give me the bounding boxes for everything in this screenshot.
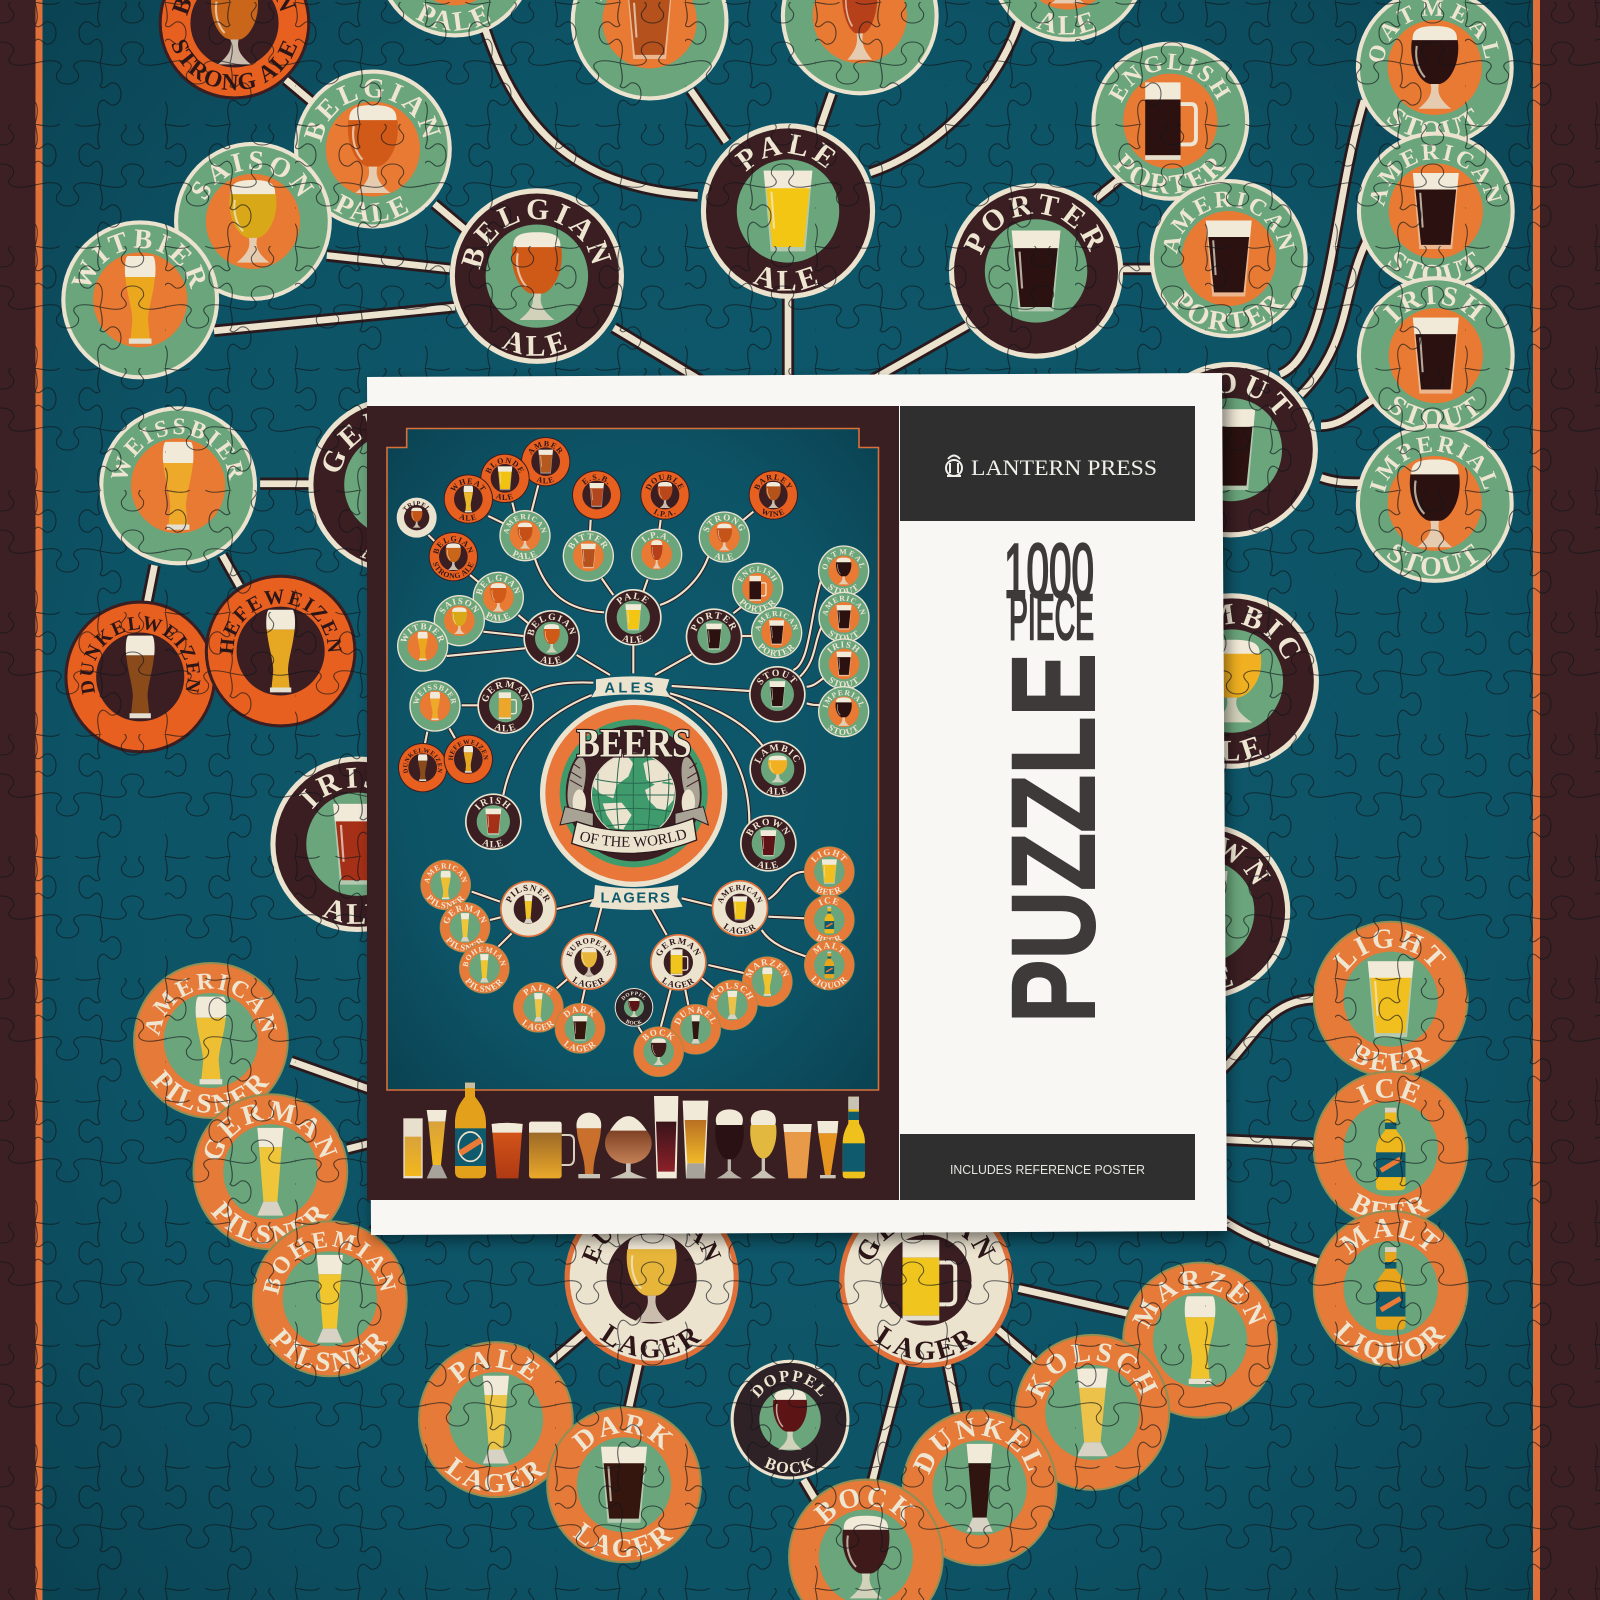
badge: Dunkel <box>902 1409 1058 1566</box>
badge: Light Beer: BEER <box>1350 1043 1430 1071</box>
badge: German Lager <box>839 1192 1014 1368</box>
badge: Hefeweizen <box>205 575 356 728</box>
badge: Hefeweizen: HEFEWEIZEN <box>220 589 342 654</box>
badge: Belgian Strong Ale <box>158 0 310 100</box>
badge: European Lager <box>565 1190 739 1366</box>
badge: Brown Ale <box>1116 824 1290 999</box>
badge: German Ale: ALE <box>360 550 367 559</box>
badge: Pale Ale <box>701 123 875 299</box>
badge: Marzen <box>1122 1262 1278 1419</box>
badge: Kolsch <box>1015 1334 1170 1491</box>
badge: Lambic Ale <box>1145 593 1319 769</box>
badge: Irish Stout <box>1357 276 1515 435</box>
glass: orange nonic <box>783 1124 812 1178</box>
mini poster tree <box>397 437 870 1077</box>
mini poster teal field <box>387 428 878 1090</box>
badge: Oatmeal Stout <box>1356 0 1514 147</box>
badge: German Lager: LAGER <box>870 1320 983 1367</box>
badge: Pale Lager: PALE <box>443 1343 548 1389</box>
badge: German Ale <box>308 397 483 573</box>
badge: Irish Ale: IRISH <box>298 768 367 810</box>
badge: Light Beer <box>1313 921 1469 1079</box>
badge: American Stout: STOUT <box>1388 251 1480 280</box>
badge: Belgian Ale <box>450 188 624 364</box>
badge: Pale Lager <box>418 1341 574 1499</box>
label plaque: Ales: ALES <box>699 402 860 453</box>
badge: Bock <box>788 1479 944 1600</box>
badge: American Porter: AMERICAN <box>1164 192 1295 254</box>
badge: Strong Ale: ALE <box>1036 12 1096 34</box>
icon: lantern <box>946 456 962 476</box>
badge: American Pilsner: PILSNER <box>145 1065 277 1121</box>
glass: pilsner <box>427 1110 447 1178</box>
glass: hefeweizen <box>576 1113 601 1178</box>
central medallion: Beers of the World: BEERS <box>613 531 967 670</box>
badge: Lambic Ale: LAMBIC <box>1223 604 1301 660</box>
glass: red ale nonic <box>492 1123 523 1178</box>
badge: German Pilsner: GERMAN <box>196 1095 344 1166</box>
badge: Belgian Ale: ALE <box>501 332 567 356</box>
badge: German Ale: GERMAN <box>323 414 367 472</box>
badge: Dark Lager: DARK <box>567 1408 681 1458</box>
badge: Saison <box>174 142 332 301</box>
label plaque: Lagers: LAGERS <box>687 1054 906 1105</box>
badge: Pale Lager: LAGER <box>440 1452 552 1499</box>
badge: Oatmeal Stout: STOUT <box>1386 108 1479 136</box>
badge: Saison: SAISON <box>192 151 314 200</box>
badge: American Lager: AMERICAN <box>1041 1034 1191 1102</box>
glass: tall dark ale <box>654 1096 678 1178</box>
badge: English Porter: ENGLISH <box>1108 54 1231 103</box>
brand: Lantern Press: LANTERN PRESS <box>971 455 1157 480</box>
badge: American Lager <box>1029 1025 1203 1201</box>
puzzle box <box>367 373 1227 1235</box>
badge: Witbier <box>61 220 219 379</box>
badge: American Stout: AMERICAN <box>1370 144 1502 206</box>
badge: European Lager: EUROPEAN <box>577 1199 726 1267</box>
heading: Puzzle: PUZZLE <box>988 653 1120 1023</box>
label plaque: Ales <box>659 394 903 459</box>
wheat sprigs <box>575 640 1003 827</box>
badge: American Stout <box>1357 131 1515 291</box>
central medallion: Beers of the World: OF THE WORLD <box>618 856 958 933</box>
glass: dark tulip <box>715 1109 744 1178</box>
badge: American Porter: PORTER <box>1172 290 1285 332</box>
badge: Pale Ale: ALE <box>752 266 818 291</box>
badge: Porter: PORTER <box>963 194 1104 256</box>
badge: Witbier: WITBIER <box>71 229 206 290</box>
badge: European Lager: LAGER <box>595 1318 708 1365</box>
badge: Dark Lager <box>546 1406 702 1564</box>
glass: snifter <box>605 1116 652 1178</box>
badge: Pilsner <box>378 1027 552 1203</box>
badge: Weissbier: WEISSBIER <box>110 418 243 481</box>
badge: English Porter <box>1091 42 1250 201</box>
badge: Weissbier <box>99 406 257 565</box>
badge: German Pilsner <box>192 1093 348 1252</box>
badge: Light Beer: LIGHT <box>1332 929 1446 972</box>
badge: Doppel Bock: BOCK <box>762 1453 818 1478</box>
glass: short pilsner <box>817 1121 838 1178</box>
badge: Bock: BOCK <box>809 1481 923 1530</box>
badge: Brown Ale: BROWN <box>1224 837 1271 884</box>
glass: straight pint <box>403 1118 423 1178</box>
badge: Ice Beer: BEER <box>1346 1187 1435 1229</box>
badge: Dark Lager: LAGER <box>568 1517 680 1564</box>
globe <box>591 752 676 830</box>
badge: Irish Stout: STOUT <box>1388 396 1480 426</box>
badge: Imperial Stout <box>1356 424 1514 583</box>
badge: Bohemian Pilsner <box>252 1220 408 1379</box>
glass: weizen <box>683 1101 708 1178</box>
bottle: slim <box>843 1097 865 1178</box>
badge: Ice Beer: ICE <box>1353 1073 1427 1111</box>
badge: Pale Ale: PALE <box>734 134 836 172</box>
badge: Doppel Bock: DOPPEL <box>747 1366 833 1401</box>
glass: golden tulip <box>750 1110 776 1178</box>
badge: Dunkel: DUNKEL <box>907 1411 1052 1478</box>
badge: English Porter: PORTER <box>1113 152 1226 194</box>
bottom black bar <box>900 1134 1195 1200</box>
mini poster panel <box>367 406 899 1200</box>
badge: Porter <box>949 183 1123 359</box>
badge: Stout <box>1144 362 1318 537</box>
badge: American Pale <box>388 0 522 38</box>
badge: Belgian Pale: PALE <box>334 194 409 222</box>
badge: I.P.A. <box>780 0 939 96</box>
badge: Bohemian Pilsner: PILSNER <box>264 1323 395 1379</box>
caption: includes reference poster: INCLUDES REFERENCE POSTER <box>950 1163 1145 1177</box>
badge: Malt Liquor: MALT <box>1335 1212 1447 1261</box>
badge: Stout: STOUT <box>1222 373 1294 415</box>
badge: Dunkelweizen <box>64 600 216 753</box>
glass row <box>403 1083 865 1178</box>
badge: Dunkelweizen: DUNKELWEIZEN <box>80 616 200 695</box>
badge: Ice Beer <box>1313 1070 1469 1229</box>
top black brand bar <box>900 406 1195 521</box>
badge: Brown Ale: ALE <box>1225 966 1234 988</box>
badge: Lambic Ale: ALE <box>1224 736 1262 761</box>
badge: German Lager: GERMAN <box>850 1198 1003 1267</box>
glass: mug <box>529 1122 574 1178</box>
badge: Strong Ale <box>998 0 1138 42</box>
badge: Bitter <box>570 0 729 100</box>
badge: American Lager: LAGER <box>1060 1153 1172 1199</box>
badge: Bohemian Pilsner: BOHEMIAN <box>259 1226 401 1297</box>
badge: Marzen: MARZEN <box>1127 1263 1273 1333</box>
box shadow <box>372 382 1228 1240</box>
label plaque: Lagers <box>653 1041 940 1118</box>
badge: American Pilsner: AMERICAN <box>140 968 282 1038</box>
badge: Imperial Stout: STOUT <box>1386 544 1479 576</box>
badge: Malt Liquor <box>1313 1210 1469 1369</box>
badge: Irish Stout: IRISH <box>1382 286 1486 324</box>
badge: Irish Ale <box>270 756 445 932</box>
badge: Belgian Ale: BELGIAN <box>461 199 612 270</box>
badge: Belgian Pale <box>294 70 452 229</box>
heading: 1000: 1000 <box>1004 529 1094 614</box>
bottle: large <box>455 1083 486 1178</box>
badge: German Pilsner: PILSNER <box>205 1196 336 1252</box>
connector lines <box>147 0 1372 1505</box>
badge: Irish Ale: ALE <box>322 900 367 924</box>
central medallion: Beers of the World <box>540 531 967 887</box>
puzzle product photo: PIECE <box>1009 581 1094 653</box>
badge: Imperial Stout: IMPERIAL <box>1370 436 1496 493</box>
badge: American Porter <box>1150 179 1308 338</box>
badge: American Pilsner <box>133 962 289 1121</box>
badge: Kolsch: KOLSCH <box>1020 1336 1165 1403</box>
badge: Malt Liquor: LIQUOR <box>1329 1316 1453 1369</box>
badge: Pilsner: PILSNER <box>390 1033 541 1100</box>
badge: Belgian Strong Ale: STRONG ALE <box>172 40 298 90</box>
badge: Doppel Bock <box>731 1360 850 1480</box>
badge: Belgian Pale: BELGIAN <box>304 78 441 142</box>
